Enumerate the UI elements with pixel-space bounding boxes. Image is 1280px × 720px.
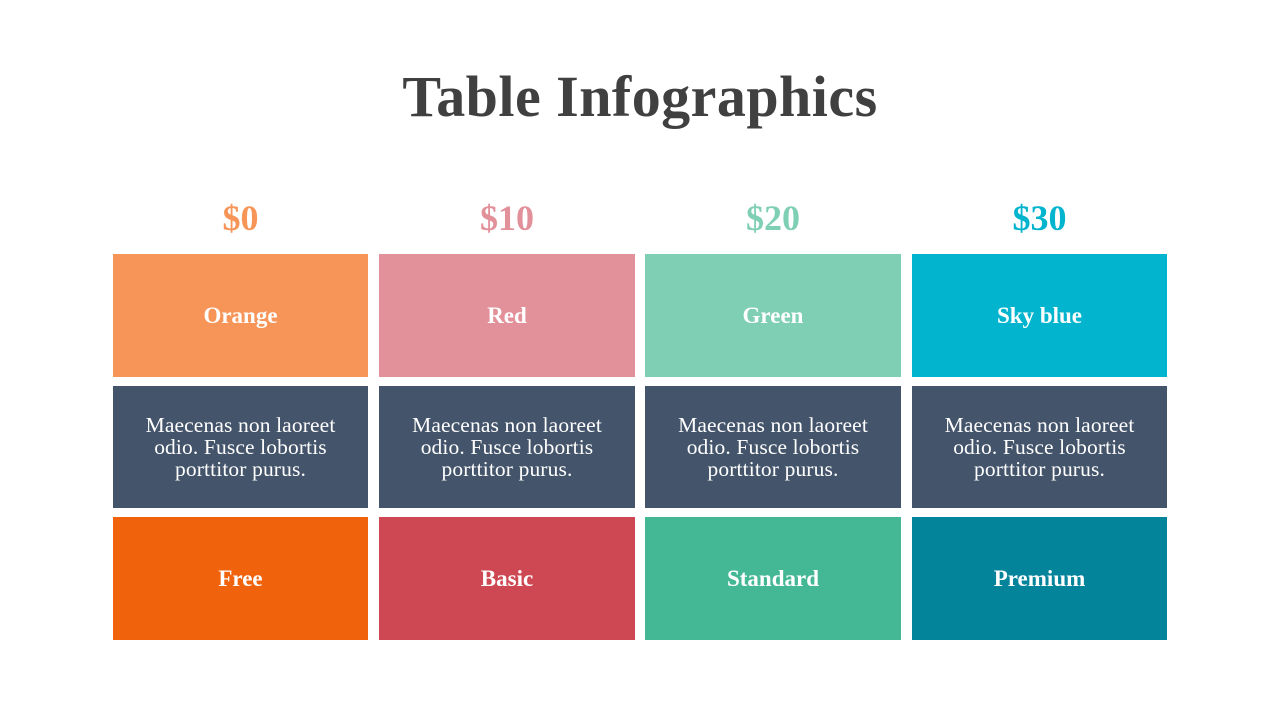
header cell: Green: Green — [743, 302, 803, 328]
description cell 4 — [912, 386, 1167, 508]
description cell 3: porttitor purus. — [708, 457, 838, 481]
description cell 1: Maecenas non laoreet — [146, 413, 335, 437]
plan cell: Premium — [912, 517, 1167, 640]
description cell 4: porttitor purus. — [974, 457, 1105, 481]
plan cell: Standard: Standard — [727, 566, 819, 590]
header cell: Red: Red — [487, 302, 527, 328]
price: $10: $10 — [480, 198, 534, 238]
plan cell: Premium: Premium — [994, 566, 1085, 590]
price: $30: $30 — [1012, 198, 1066, 238]
plan cell: Basic: Basic — [481, 566, 533, 590]
header cell: Red — [379, 254, 635, 377]
price: $20: $20 — [746, 198, 800, 238]
header cell: Orange: Orange — [203, 302, 278, 328]
description cell 2 — [379, 386, 635, 508]
description cell 3: odio. Fusce lobortis — [687, 435, 859, 459]
description cell 3: Maecenas non laoreet — [678, 413, 868, 437]
price: $0: $0 — [222, 198, 258, 238]
header cell: Sky blue: Sky blue — [997, 302, 1082, 328]
description cell 4: odio. Fusce lobortis — [953, 435, 1126, 459]
description cell 3 — [645, 386, 901, 508]
title: Table Infographics — [402, 64, 878, 129]
plan cell: Standard — [645, 517, 901, 640]
header cell: Green — [645, 254, 901, 377]
description cell 2: porttitor purus. — [442, 457, 572, 481]
description cell 1 — [113, 386, 368, 508]
header cell: Orange — [113, 254, 368, 377]
description cell 4: Maecenas non laoreet — [945, 413, 1134, 437]
header cell: Sky blue — [912, 254, 1167, 377]
plan cell: Free: Free — [218, 566, 263, 590]
plan cell: Basic — [379, 517, 635, 640]
description cell 2: Maecenas non laoreet — [412, 413, 602, 437]
description cell 1: odio. Fusce lobortis — [154, 435, 327, 459]
description cell 1: porttitor purus. — [175, 457, 306, 481]
plan cell: Free — [113, 517, 368, 640]
description cell 2: odio. Fusce lobortis — [421, 435, 593, 459]
